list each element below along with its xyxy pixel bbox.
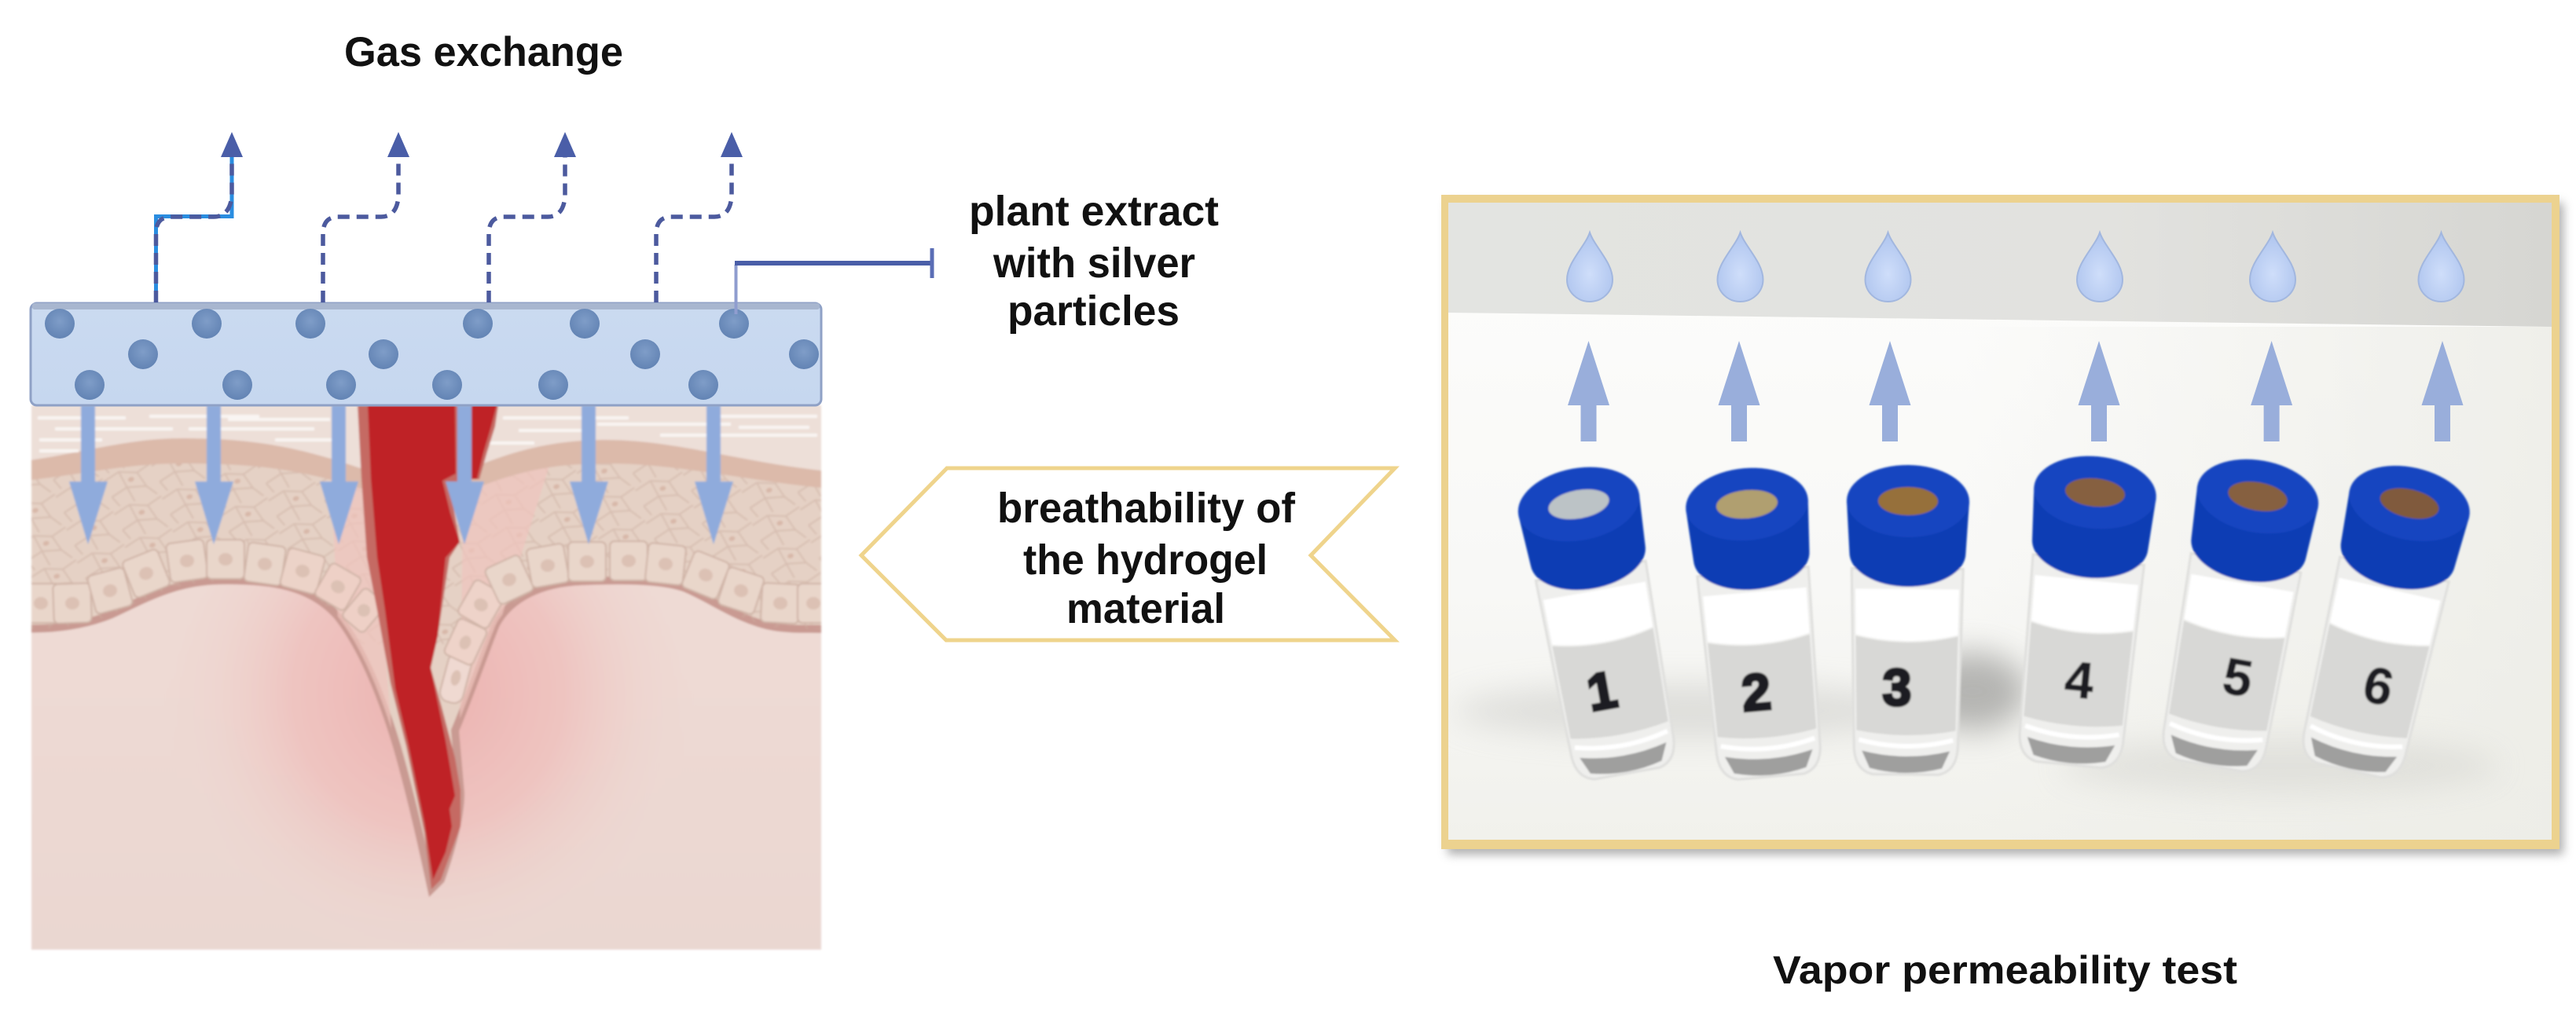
label: plant extract with silver particles: particles [1007, 287, 1180, 335]
epidermis layers [22, 401, 835, 889]
vial 5 [2150, 450, 2325, 776]
vial 2: 2 [1739, 661, 1773, 722]
photo background: table and wall [1448, 203, 2552, 840]
callout: breathability of the hydrogel material: breathability of [997, 485, 1296, 532]
label: plant extract with silver particles: with silver [993, 240, 1195, 287]
illustration: wound skin cross section [22, 401, 835, 966]
panel: vapor permeability photo [1441, 195, 2563, 855]
callout: breathability of the hydrogel material [861, 468, 1395, 640]
arrow: gas exchange 2 [323, 132, 409, 302]
vial 5: 5 [2218, 646, 2257, 709]
vial 6: 6 [2358, 654, 2399, 717]
vial 1 [1512, 458, 1687, 784]
photo frame [1441, 195, 2559, 849]
hydrogel layer with silver particles [31, 303, 821, 405]
arrow: gas exchange 3 [489, 132, 576, 302]
arrow: gas exchange 1 (highlighted) [156, 132, 243, 302]
dermis tissue with red glow [31, 584, 822, 950]
basal keratinocyte cells [22, 539, 835, 705]
frame shadow [1448, 203, 2563, 855]
callout: breathability of the hydrogel material: the hydrogel [1023, 536, 1268, 584]
silver particles [45, 309, 819, 400]
caption: vapor permeability test: Vapor permeability test [1773, 948, 2237, 992]
arrows: moisture into wound [69, 405, 733, 544]
vial 2 [1682, 463, 1832, 782]
vial 3 [1844, 464, 1969, 775]
band: stratum corneum [24, 401, 829, 471]
vial 1: 1 [1583, 660, 1621, 722]
wound: darker rim [358, 405, 498, 889]
heading: gas exchange: Gas exchange [344, 29, 623, 75]
arrows: vapor rising [1568, 341, 2463, 441]
wound: red blood clot [368, 405, 497, 880]
leader line to particle label [735, 248, 933, 314]
callout: breathability of the hydrogel material: material [1066, 585, 1225, 632]
label: plant extract with silver particles [969, 188, 1219, 335]
arrow: gas exchange 4 [656, 132, 743, 302]
vial 4: 4 [2062, 650, 2097, 710]
water droplets [1567, 233, 2464, 302]
vial 4 [2008, 451, 2160, 771]
vial 6 [2289, 455, 2477, 784]
vial 3: 3 [1882, 658, 1912, 716]
label: plant extract with silver particles: plant extract [969, 188, 1219, 235]
band: granular layer [24, 438, 829, 493]
